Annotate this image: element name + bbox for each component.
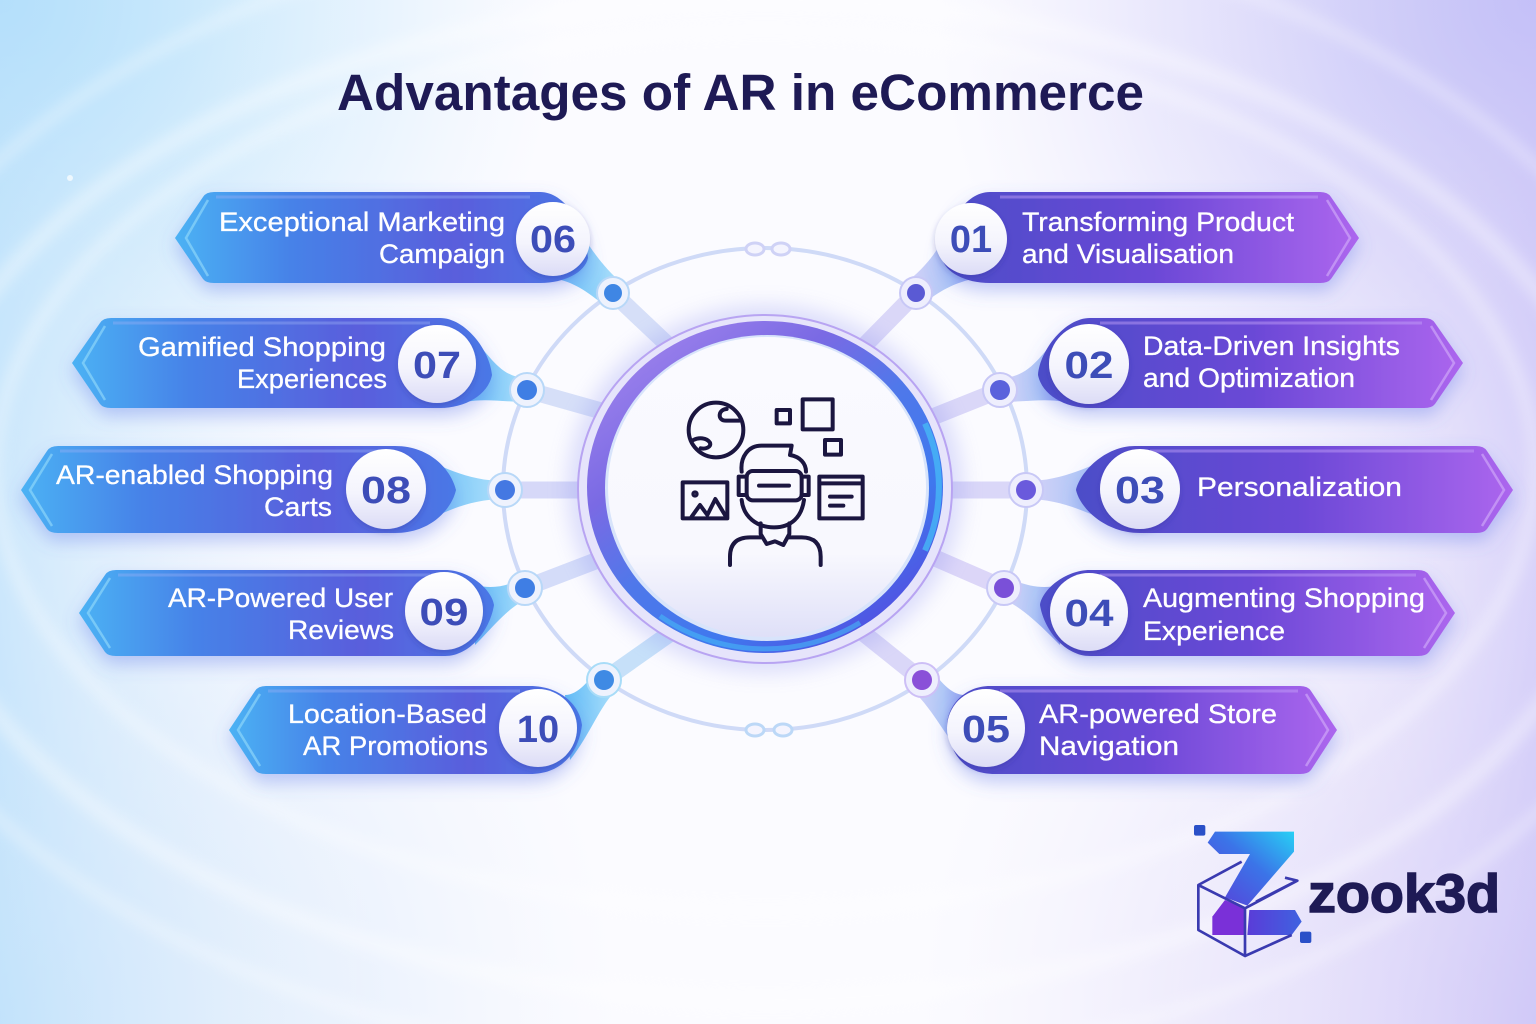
node [508, 571, 542, 605]
number badge [1050, 573, 1128, 651]
label: Exceptional Marketing [219, 207, 505, 237]
logo mark [1194, 825, 1311, 956]
number badge: 04 [1064, 593, 1114, 635]
panel: item 10 [229, 663, 621, 774]
number badge: 05 [962, 709, 1010, 751]
panel: item 02 [983, 318, 1463, 408]
panel: item 09 [79, 570, 542, 656]
label [56, 460, 333, 522]
label: Campaign [379, 239, 505, 269]
logo wordmark: zook3d [1308, 864, 1500, 924]
number badge [516, 202, 590, 276]
node [1009, 473, 1043, 507]
label [219, 207, 505, 269]
number badge [346, 449, 426, 529]
number badge: 02 [1064, 345, 1114, 387]
number badge [1100, 449, 1180, 529]
number badge: 09 [420, 592, 468, 634]
label [1143, 331, 1400, 393]
label: Carts [264, 492, 332, 522]
panel: item 06 [175, 192, 629, 309]
label: AR Promotions [303, 731, 488, 761]
logo: zook3d [1194, 825, 1500, 956]
label: Augmenting Shopping [1143, 583, 1425, 613]
node [983, 373, 1017, 407]
node [597, 277, 629, 309]
number badge: 10 [517, 709, 559, 751]
panel: item 08 [21, 446, 522, 533]
panel: item 03 [1009, 446, 1513, 533]
panel: item 01 [900, 192, 1359, 309]
node [900, 277, 932, 309]
label [1039, 699, 1277, 761]
node [488, 473, 522, 507]
panel: item 05 [905, 663, 1337, 774]
number badge [405, 572, 483, 650]
node [905, 663, 939, 697]
number badge [935, 203, 1007, 275]
number badge: 08 [361, 470, 411, 512]
number badge: 01 [950, 219, 992, 261]
label: and Optimization [1143, 363, 1355, 393]
panel: item 07 [72, 318, 544, 408]
label: Reviews [288, 615, 394, 645]
node [987, 571, 1021, 605]
panel: item 04 [987, 570, 1455, 656]
label: Personalization [1197, 472, 1402, 502]
node [510, 373, 544, 407]
number badge: 06 [530, 219, 576, 261]
number badge [398, 325, 476, 403]
label [1022, 207, 1295, 269]
label [138, 332, 387, 394]
label: Experiences [237, 364, 387, 394]
label [1143, 583, 1425, 646]
label: Experience [1143, 616, 1285, 646]
label [288, 699, 488, 761]
label: Navigation [1039, 731, 1179, 761]
label [168, 583, 394, 645]
number badge: 03 [1115, 470, 1165, 512]
label: and Visualisation [1022, 239, 1234, 269]
title: Advantages of AR in eCommerce [337, 64, 1144, 121]
number badge: 07 [413, 345, 461, 387]
label: Data-Driven Insights [1143, 331, 1400, 361]
number badge [499, 689, 577, 767]
label: AR-Powered User [168, 583, 393, 613]
label: AR-powered Store [1039, 699, 1277, 729]
node [587, 663, 621, 697]
outer orbit ring [503, 243, 1027, 736]
central hub [567, 305, 963, 673]
label: Gamified Shopping [138, 332, 386, 362]
number badge [947, 689, 1025, 767]
label: AR-enabled Shopping [56, 460, 333, 490]
label: Transforming Product [1022, 207, 1295, 237]
number badge [1049, 324, 1129, 404]
label: Location-Based [288, 699, 487, 729]
icon: person wearing VR headset with floating objects [683, 399, 863, 565]
connector spokes [505, 293, 1026, 680]
